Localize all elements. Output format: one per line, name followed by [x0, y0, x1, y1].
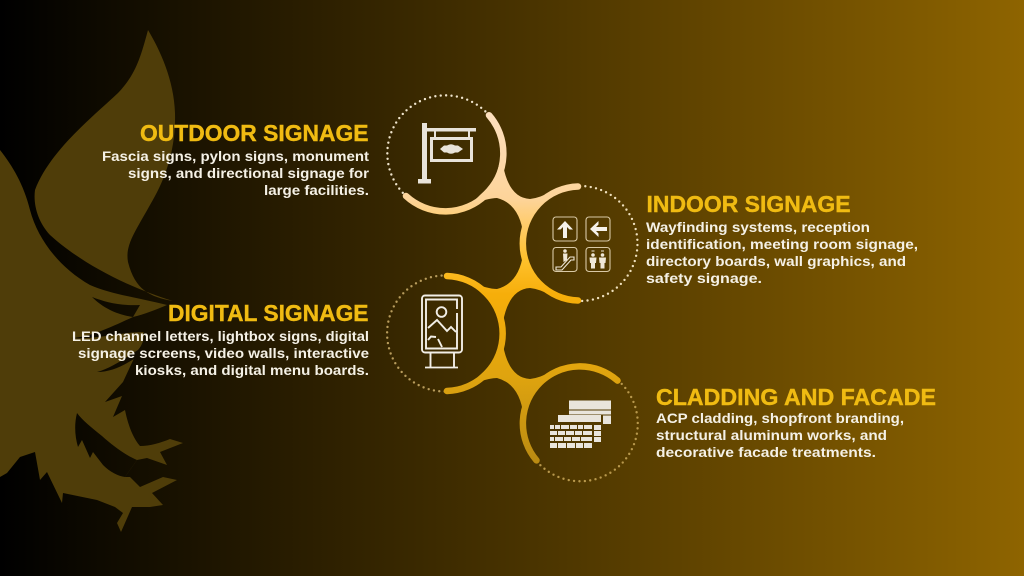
text block: digital signage: kiosks, and digital menu boards.	[135, 363, 369, 378]
text block: indoor signage: Wayfinding systems, reception	[646, 220, 870, 235]
text block: digital signage: LED channel letters, lightbox signs, digital	[72, 329, 369, 344]
icon: digital poster stand	[422, 296, 462, 368]
connected ribbon arcs	[406, 115, 618, 460]
text block: indoor signage: safety signage.	[646, 271, 762, 286]
text block: outdoor signage: Fascia signs, pylon signs, monument	[102, 149, 370, 164]
text block: outdoor signage: large facilities.	[264, 183, 369, 198]
text block: indoor signage: identification, meeting room signage,	[646, 237, 918, 252]
text block: indoor signage	[646, 191, 918, 286]
text block: outdoor signage	[102, 120, 370, 198]
text block: cladding and facade: structural aluminum works, and	[656, 428, 887, 443]
text block: cladding and facade: ACP cladding, shopfront branding,	[656, 411, 904, 426]
text block: cladding and facade: decorative facade treatments.	[656, 445, 876, 460]
text block: cladding and facade	[656, 384, 936, 460]
text block: digital signage: signage screens, video walls, interactive	[78, 346, 370, 361]
text block: cladding and facade: CLADDING AND FACADE	[656, 384, 936, 410]
text block: outdoor signage: signs, and directional signage for	[128, 166, 370, 181]
icon: hanging sign	[418, 123, 476, 184]
text block: digital signage: DIGITAL SIGNAGE	[168, 300, 368, 326]
text block: outdoor signage: OUTDOOR SIGNAGE	[140, 120, 368, 146]
text block: indoor signage: INDOOR SIGNAGE	[646, 191, 850, 217]
text block: digital signage	[72, 300, 370, 378]
eagle silhouette	[0, 30, 183, 532]
text block: indoor signage: directory boards, wall graphics, and	[646, 254, 906, 269]
icon: wayfinding pictograms	[553, 217, 610, 272]
icon: cladding panels and bricks	[550, 400, 611, 448]
dotted circles	[387, 95, 638, 481]
